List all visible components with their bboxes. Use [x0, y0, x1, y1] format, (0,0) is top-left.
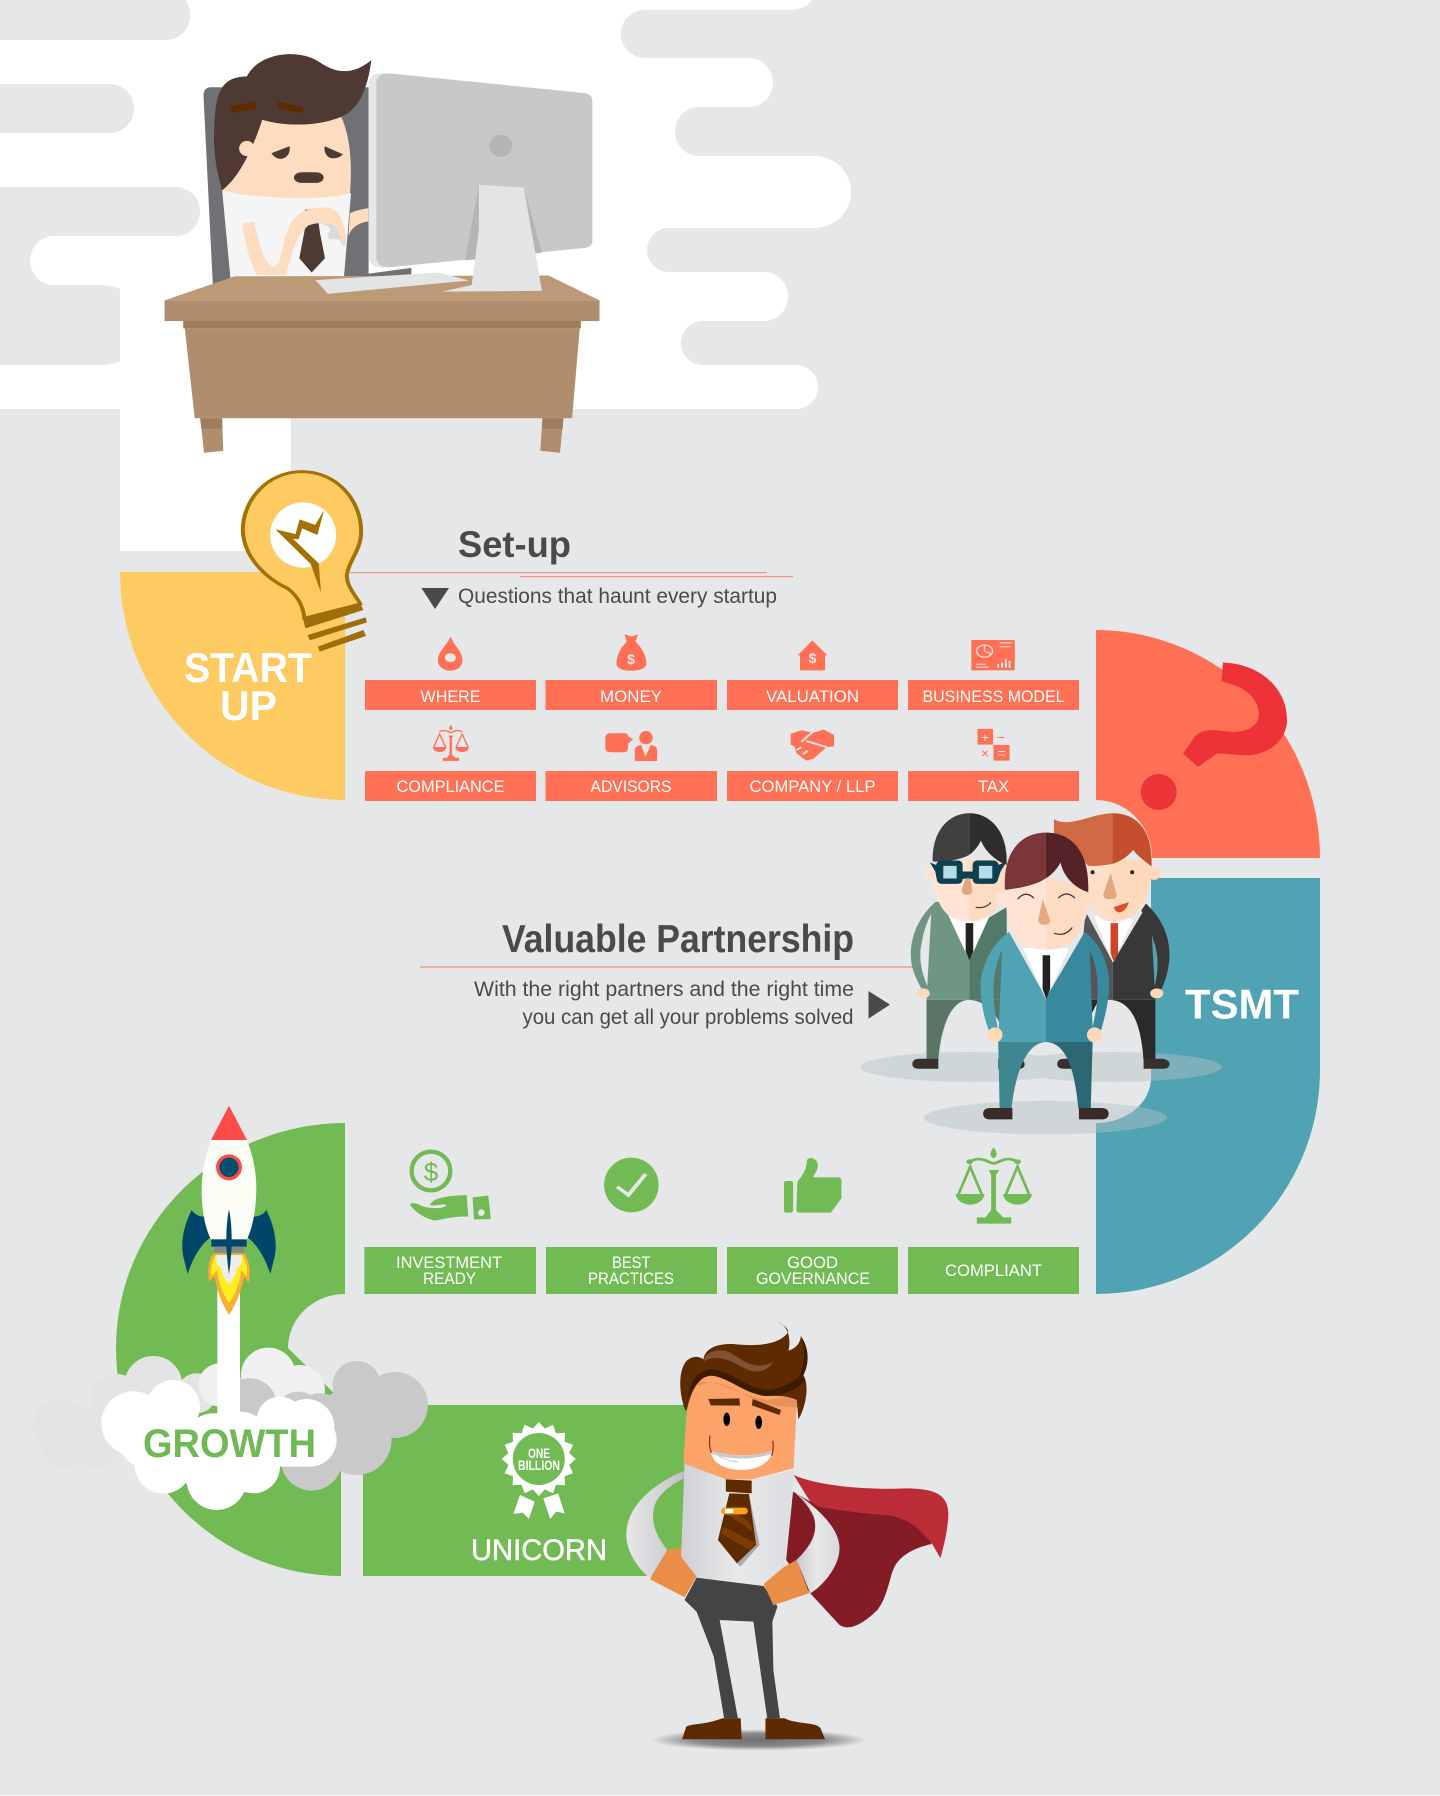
- compliance item: [365, 771, 536, 801]
- head and hair: [680, 1322, 808, 1479]
- left arm: [626, 1471, 684, 1578]
- advisors item: [546, 771, 717, 801]
- hair dark band: [687, 1336, 808, 1400]
- ear: [239, 141, 255, 156]
- tax symbols: +: [981, 729, 989, 745]
- compliance item: COMPLIANCE: [396, 777, 504, 796]
- bulb base: [303, 603, 363, 628]
- monitor stand: [442, 185, 542, 292]
- monitor button: [489, 135, 512, 157]
- monitor back: [369, 73, 384, 268]
- icons: orange row in zoom coordinates: [438, 634, 657, 761]
- heading: growth: GROWTH: [143, 1422, 316, 1466]
- money item: [546, 680, 717, 710]
- keyboard: [315, 272, 469, 294]
- desk body: [185, 328, 580, 418]
- icon: tax squares: [977, 729, 1010, 761]
- heading: unicorn: UNICORN: [471, 1534, 607, 1567]
- chair: [203, 87, 411, 285]
- icon: handshake: [791, 730, 834, 761]
- valuation item: [727, 680, 898, 710]
- company item: [727, 771, 898, 801]
- necktie: [299, 208, 325, 273]
- tie stripes: [721, 1507, 755, 1550]
- base thread top: [308, 617, 367, 640]
- partner: front teal suit: [980, 833, 1109, 1119]
- good governance item: [727, 1247, 898, 1294]
- heading: start up: [184, 644, 312, 729]
- hair highlight: [703, 1350, 773, 1371]
- money bag dollar: $: [627, 651, 635, 667]
- business model item: [908, 680, 1079, 710]
- compliant item: [908, 1247, 1079, 1294]
- icons: orange row right: [791, 640, 1015, 761]
- ribbons: [513, 1493, 565, 1519]
- hands: [650, 1547, 809, 1605]
- compliant item: COMPLIANT: [945, 1261, 1042, 1280]
- icon: business board: [971, 640, 1015, 670]
- mouth corners: [709, 1436, 773, 1456]
- best practices item: BEST: [612, 1253, 650, 1272]
- monitor stand shadow: [465, 185, 542, 260]
- eyes: [723, 1413, 762, 1429]
- icon: advisors: [605, 731, 657, 761]
- shirt: [222, 190, 351, 277]
- where item: WHERE: [420, 687, 480, 706]
- heading: start up: UP: [220, 682, 277, 729]
- forehead shade: [695, 1382, 798, 1407]
- illustration: superhero founder: [626, 1322, 948, 1751]
- smile line: [718, 1456, 738, 1462]
- panel: teal quarter: [1096, 878, 1320, 1294]
- panel: unicorn band: [363, 1405, 688, 1576]
- hair: [214, 54, 371, 190]
- icon: question mark: [1141, 662, 1287, 810]
- arrow: down: [421, 588, 449, 609]
- front white cloud: [101, 1380, 337, 1510]
- tax symbols: ×: [981, 745, 989, 761]
- ground shadow: [650, 1729, 867, 1751]
- tax item: TAX: [978, 777, 1009, 796]
- investment ready item: INVESTMENT: [396, 1253, 502, 1272]
- arrow: right: [868, 991, 890, 1019]
- icon: compliance scale: [433, 725, 469, 761]
- illustration: tired founder at desk: [165, 54, 600, 453]
- grey cloud: [223, 1361, 428, 1491]
- teeth shade: [711, 1451, 772, 1458]
- far arm: [348, 208, 368, 237]
- shirt torso: [681, 1463, 794, 1586]
- rocket: [182, 1106, 276, 1315]
- rocket smoke trail: [217, 1277, 240, 1427]
- crack: [275, 510, 324, 593]
- panel: green growth arc: [116, 1123, 345, 1576]
- back pale cloud: [198, 1348, 325, 1415]
- panel: red quarter: [1096, 630, 1320, 858]
- partnership text: With the right partners and the right time: [474, 977, 854, 1001]
- base thread bottom: [318, 630, 366, 652]
- company item: COMPANY / LLP: [750, 777, 876, 796]
- badge text second line: BILLION: [518, 1458, 560, 1473]
- monitor panel: [376, 73, 592, 267]
- valuation item: VALUATION: [766, 687, 859, 706]
- glow centre: [270, 502, 336, 568]
- investment ready item: READY: [423, 1269, 476, 1288]
- shoes: [682, 1718, 825, 1739]
- heading: set-up: Set-up: [458, 524, 571, 565]
- icon: house: [798, 640, 827, 670]
- divider: [420, 966, 916, 968]
- cape dark: [786, 1492, 932, 1627]
- best practices item: [546, 1247, 717, 1294]
- tie shadow: [737, 1494, 760, 1567]
- icon: check circle: [604, 1158, 659, 1212]
- eyebrows: [708, 1398, 781, 1415]
- tax symbols: =: [997, 745, 1006, 761]
- white wavy background band: [0, 0, 851, 551]
- investment ready item: [364, 1247, 536, 1294]
- heading: tsmt: TSMT: [1185, 980, 1299, 1028]
- desk shadow strip: [183, 321, 581, 328]
- icon: cracked light bulb: [243, 472, 367, 652]
- panel: growth labels row: [364, 1247, 1079, 1294]
- face: [222, 117, 351, 198]
- good governance item: GOOD: [787, 1253, 838, 1272]
- tie clip: [721, 1508, 748, 1514]
- partnership text: [474, 977, 854, 1029]
- face: [683, 1367, 798, 1479]
- bulb glass: [243, 472, 361, 618]
- right arm: [792, 1490, 840, 1593]
- tie knot: [726, 1479, 752, 1493]
- icon: money bag: [616, 634, 646, 671]
- panel: question grid: [365, 680, 1079, 801]
- tax symbols: −: [997, 729, 1005, 745]
- desk top: [165, 276, 600, 300]
- subheading: Questions that haunt every startup: [458, 584, 777, 608]
- inner circle: [513, 1433, 565, 1485]
- money item: MONEY: [600, 687, 662, 706]
- partner: left green suit: [911, 813, 1025, 1069]
- house dollar: $: [809, 650, 817, 666]
- where item: [365, 680, 536, 710]
- partner: right black suit: [1054, 813, 1170, 1069]
- desk front slab: [165, 300, 600, 321]
- business model item: BUSINESS MODEL: [922, 687, 1064, 706]
- best practices item: PRACTICES: [588, 1269, 674, 1288]
- cape light: [794, 1475, 948, 1558]
- tax item: [908, 771, 1079, 801]
- badge text: ONE: [528, 1446, 550, 1461]
- icon: location drop: [438, 637, 462, 671]
- rosette: [502, 1422, 576, 1496]
- good governance item: GOVERNANCE: [756, 1269, 870, 1288]
- heading: valuable partnership: Valuable Partnership: [502, 918, 854, 961]
- illustration: clouds and rocket: [33, 1106, 428, 1510]
- heading: start up: START: [184, 644, 312, 691]
- back light cloud: [33, 1356, 217, 1467]
- partnership text: you can get all your problems solved: [522, 1005, 854, 1029]
- icon: compliant scale: [956, 1147, 1032, 1224]
- smile: [711, 1451, 772, 1470]
- shadows: [860, 1052, 1221, 1134]
- icon: thumbs up: [784, 1158, 841, 1213]
- investment dollar: $: [424, 1157, 439, 1187]
- tax symbols: [981, 729, 1006, 761]
- desk leg shadow: [200, 418, 563, 429]
- icon: one billion badge: [502, 1422, 576, 1519]
- illustration: three partners: [860, 813, 1221, 1134]
- icons: green row: [604, 1147, 1032, 1224]
- upper body detail: [242, 208, 368, 275]
- hair mass: [680, 1322, 808, 1419]
- advisors item: ADVISORS: [590, 777, 672, 796]
- eyes and mouth: [272, 146, 343, 159]
- desk legs: [200, 418, 563, 453]
- eyebrows: [230, 101, 303, 113]
- divider lines: [350, 573, 793, 577]
- clip highlight: [725, 1509, 733, 1513]
- shirt cuff: [317, 223, 346, 247]
- trousers: [685, 1578, 780, 1718]
- tie body: [718, 1493, 756, 1563]
- panel: start up quarter: [120, 572, 345, 800]
- arm: [242, 208, 346, 275]
- icon: investment coin and hand: [410, 1152, 491, 1221]
- mouth: [294, 172, 324, 183]
